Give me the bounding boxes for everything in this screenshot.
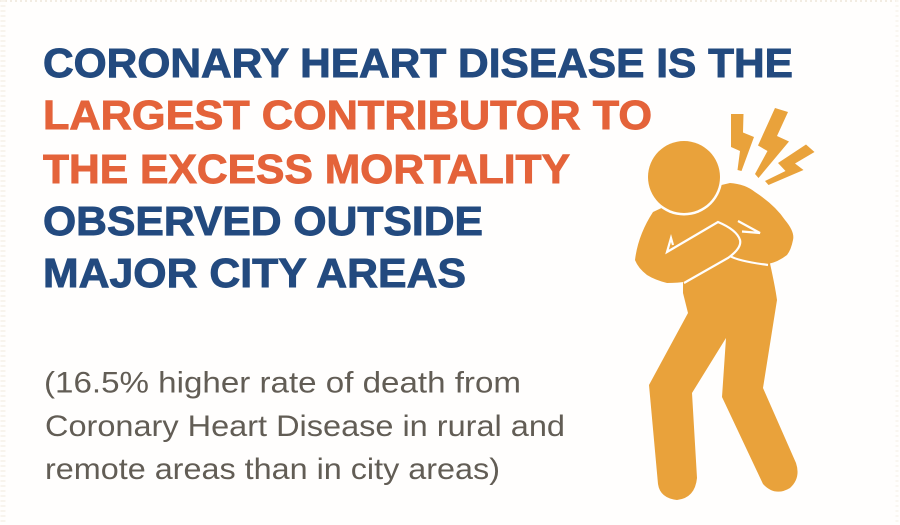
pain bolt 3 [765,144,814,185]
figure torso and legs [649,250,798,500]
figure arms and shoulders [635,183,793,283]
heading line 4: OBSERVED OUTSIDE [43,198,483,244]
body line 1: (16.5% higher rate of death from [44,366,521,400]
body line 2: Coronary Heart Disease in rural and [45,410,565,443]
icon: pain bolts [731,108,814,185]
heading line 5: MAJOR CITY AREAS [43,250,466,296]
head outline gap [646,138,722,216]
figure head [648,141,720,213]
heading line 1: CORONARY HEART DISEASE IS THE [43,40,793,86]
pain bolt 1 [731,114,754,171]
body line 3: remote areas than in city areas) [45,453,500,486]
arm crease lines [667,221,768,283]
heading [43,40,793,296]
heading line 3 highlighted: THE EXCESS MORTALITY [43,146,570,192]
body text [44,366,565,486]
pain bolt 2 [755,108,789,178]
icon: person clutching chest [635,108,814,500]
heading line 2 highlighted: LARGEST CONTRIBUTOR TO [43,92,652,138]
